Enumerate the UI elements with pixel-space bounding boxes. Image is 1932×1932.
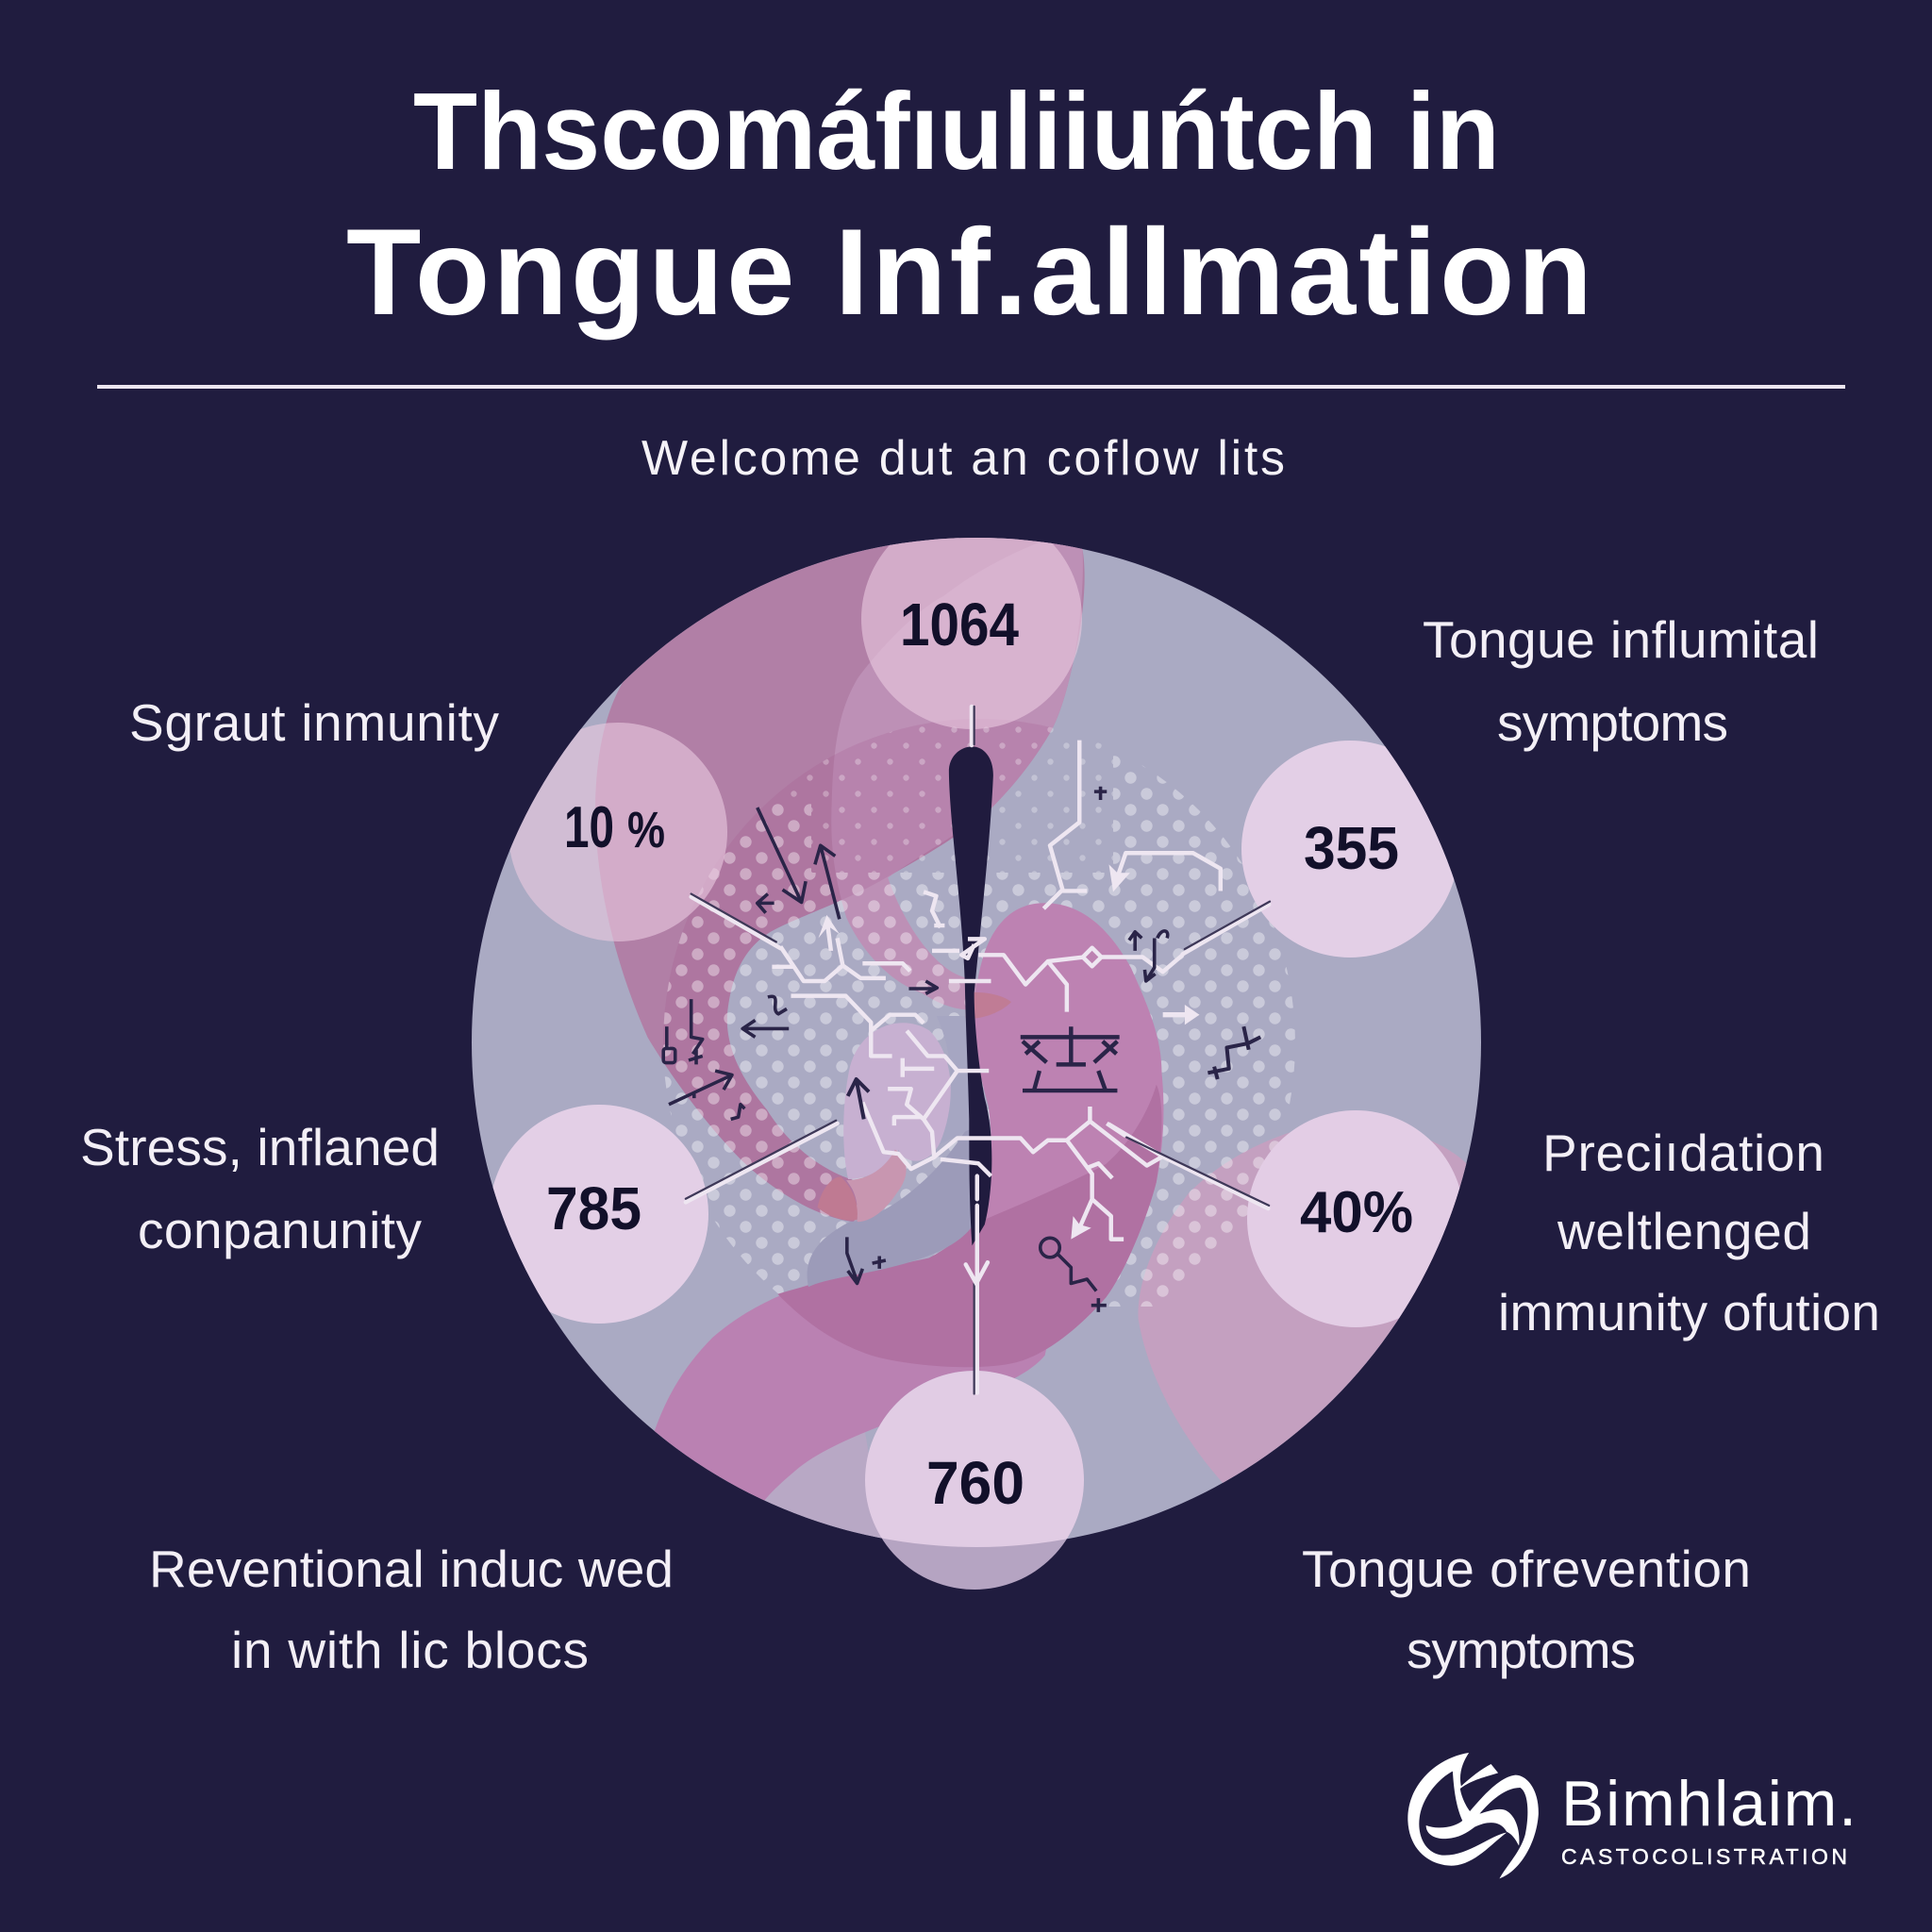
central lobe: [958, 903, 1163, 1362]
bubble 355 disc: [1241, 741, 1458, 958]
light blob: [843, 1023, 951, 1179]
base disc: [472, 538, 1481, 1547]
number 785: 785: [546, 1174, 641, 1242]
dot pattern: [660, 717, 1302, 1307]
label bottom right: [1302, 1540, 1751, 1679]
overlap highlight: [966, 992, 1011, 1019]
bubble 40% disc: [1247, 1110, 1464, 1327]
lower right pink lobe: [1138, 1132, 1466, 1483]
label top right: [1423, 610, 1819, 752]
label bottom right: Tongue ofrevention: [1302, 1540, 1751, 1598]
bubble 760 inner: [865, 1371, 1084, 1547]
subtitle: Welcome dut an coflow lits: [641, 431, 1285, 486]
pale area below band: [764, 1432, 881, 1538]
circular diagram: [472, 538, 1481, 1540]
callout lines: [686, 707, 1270, 1393]
dark symbols and arrows: [663, 787, 1260, 1312]
number 10 %: %: [627, 802, 665, 858]
ribbon tip overlaps: [818, 1150, 907, 1222]
central light lobe: [831, 541, 1083, 1010]
lower left band: [655, 1279, 1046, 1500]
number 355: 355: [1304, 814, 1399, 882]
bubble 785 disc: [490, 1105, 708, 1324]
number 10 %: 10: [564, 795, 614, 860]
label top right: symptoms: [1497, 693, 1728, 752]
label upper left: Sgraut inmunity: [129, 693, 500, 752]
logo mark: [1407, 1753, 1539, 1878]
shaded wedge: [808, 1124, 991, 1287]
tip dark: [818, 1176, 858, 1221]
bubble 760 outer: [865, 1371, 1084, 1590]
logo: [1407, 1753, 1857, 1878]
number 40%: 40%: [1300, 1180, 1413, 1245]
label right: immunity ofution: [1498, 1283, 1880, 1341]
label right: Preciıdation: [1542, 1124, 1824, 1182]
bubbles clipped to disc: [490, 508, 1464, 1327]
label lower left: [80, 1118, 440, 1259]
number 10 %: [564, 795, 665, 860]
number 760: 760: [926, 1449, 1024, 1517]
dark spindle: [949, 746, 993, 1245]
label right: [1498, 1124, 1880, 1341]
upper left ribbon: [595, 509, 1085, 1222]
white arrow: [1163, 1005, 1199, 1024]
label bottom left: [149, 1540, 674, 1679]
darker lobe shade: [777, 1085, 1162, 1367]
divider: [97, 385, 1845, 389]
title: Tongue Inf.allmation: [346, 203, 1592, 341]
bubble 1064 disc: [861, 538, 1082, 729]
label bottom left: in with lic blocs: [231, 1621, 589, 1679]
white arrowheads: [818, 864, 1130, 1240]
title: Thscomáfıuliiuńtch in: [413, 70, 1500, 192]
bubble 10% disc: [508, 723, 727, 941]
label bottom left: Reventional induc wed: [149, 1540, 674, 1598]
title: [346, 70, 1592, 341]
logo tagline: CASTOCOLISTRATION: [1561, 1844, 1847, 1869]
logo wordmark: Bimhlaim.: [1561, 1768, 1857, 1840]
label lower left: conpanunity: [138, 1201, 423, 1259]
central line art: [949, 746, 1011, 1245]
stat bubbles: [490, 508, 1464, 1590]
label top right: Tongue influmital: [1423, 610, 1819, 669]
number 1064: 1064: [900, 591, 1019, 658]
plain strip beside blob: [937, 1016, 973, 1146]
label lower left: Stress, inflaned: [80, 1118, 440, 1176]
label bottom right: symptoms: [1407, 1621, 1636, 1679]
circuit art: [663, 741, 1260, 1312]
tip light: [846, 1150, 907, 1222]
label right: weltlenged: [1557, 1202, 1811, 1260]
white circuit traces: [772, 741, 1221, 1240]
disc tint on ribbons: [663, 721, 1053, 1221]
background ribbons: [595, 509, 1557, 1561]
callout labels: [80, 610, 1880, 1679]
